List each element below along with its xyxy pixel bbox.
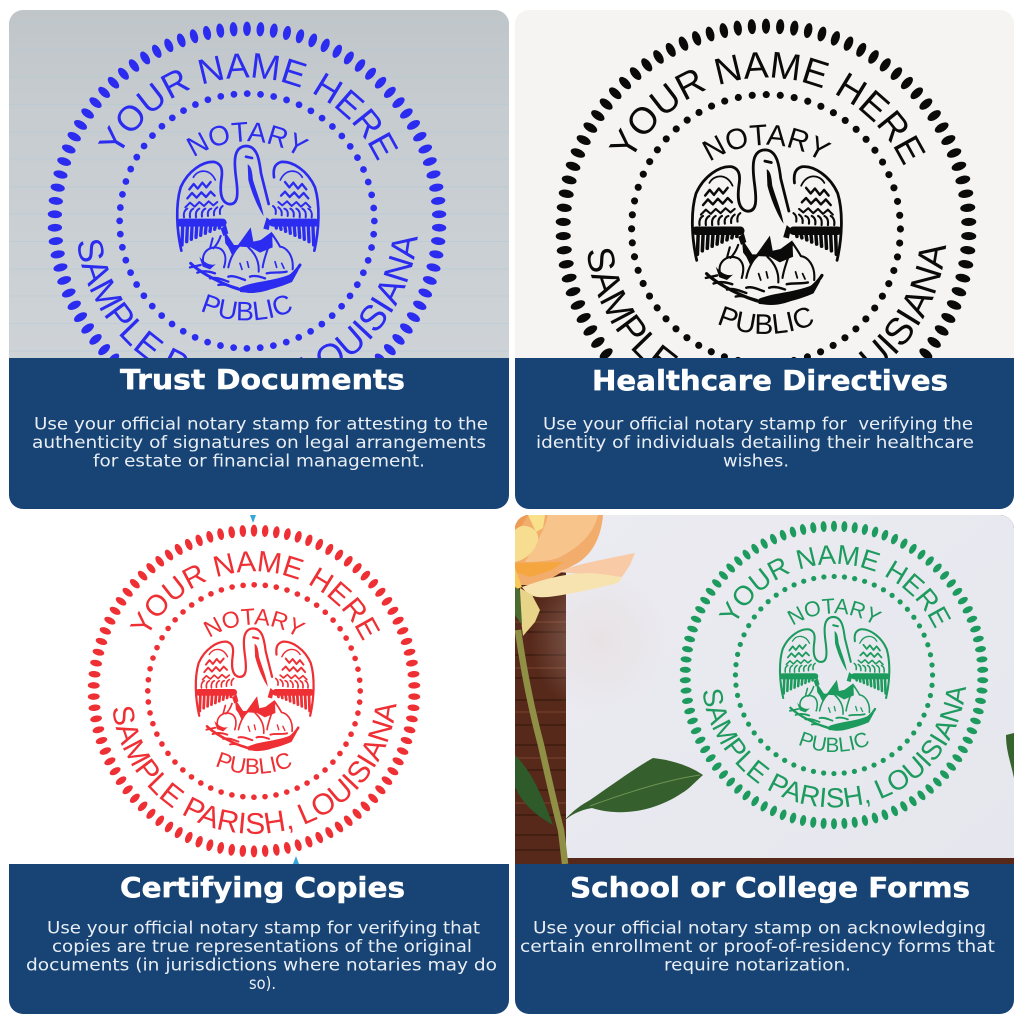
heading: Trust Documents: [120, 364, 405, 396]
caption panel: [515, 358, 1014, 509]
red notary stamp: PUBLIC: [216, 752, 292, 774]
description: so).: [249, 974, 276, 993]
description: [26, 918, 497, 993]
black notary stamp: SAMPLE PARISH, LOUISIANA: [588, 245, 946, 358]
red notary stamp: YOUR NAME HERE: [130, 551, 380, 641]
paper background: [515, 10, 1014, 360]
green notary stamp: YOUR NAME HERE: [718, 545, 952, 628]
description: [32, 414, 488, 470]
green notary stamp: SAMPLE PARISH, LOUISIANA: [703, 687, 966, 808]
caption panel: [9, 358, 509, 509]
panel: School or College Forms: [515, 515, 1014, 1014]
heading: School or College Forms: [570, 872, 970, 904]
description: [538, 416, 973, 466]
blue notary stamp: NOTARY: [186, 122, 310, 156]
panel: Certifying Copies: [9, 515, 509, 1014]
caption panel: [515, 864, 1014, 1014]
heading: Certifying Copies: [120, 872, 405, 904]
flower: rose with stem and leaves: [515, 515, 703, 864]
blue notary stamp: YOUR NAME HERE: [98, 53, 398, 161]
caption panel: [9, 864, 509, 1014]
green notary stamp: [680, 520, 988, 830]
paper photo background: [9, 10, 509, 360]
green notary stamp: PUBLIC: [799, 732, 869, 752]
blue notary stamp: SAMPLE PARISH, LOUISIANA: [78, 236, 418, 358]
white paper sheet: [530, 515, 1014, 858]
description: Use your official notary stamp for verifying the: [543, 414, 973, 434]
red notary stamp: [88, 524, 420, 858]
black notary stamp: PUBLIC: [718, 306, 814, 334]
description: Use your official notary stamp for attesting to the: [34, 414, 488, 434]
white background: [9, 515, 509, 865]
cyan corner marks: [250, 515, 299, 864]
description: authenticity of signatures on legal arrangements: [32, 433, 486, 452]
panel: Healthcare Directives: [515, 10, 1014, 509]
description: [520, 918, 996, 974]
wooden table: [515, 515, 1014, 865]
description: Use your official notary stamp on acknowledging: [533, 918, 986, 938]
blue notary stamp: [48, 22, 446, 358]
red notary stamp: NOTARY: [203, 608, 306, 637]
description: documents (in jurisdictions where notaries may do: [26, 956, 497, 974]
black notary stamp: NOTARY: [702, 124, 832, 161]
leaf at right edge: [1006, 733, 1014, 778]
description: Use your official notary stamp for verifying that: [47, 918, 481, 938]
description: certain enrollment or proof-of-residency forms that: [520, 937, 996, 956]
red notary stamp: SAMPLE PARISH, LOUISIANA: [113, 704, 396, 834]
green notary stamp: NOTARY: [787, 598, 882, 625]
description: wishes.: [723, 452, 789, 470]
description: copies are true representations of the original: [52, 937, 472, 956]
panel: Trust Documents: [9, 10, 509, 509]
description: for estate or financial management.: [93, 452, 425, 470]
black notary stamp: [556, 18, 976, 358]
blue notary stamp: PUBLIC: [202, 294, 292, 320]
heading: Healthcare Directives: [592, 365, 948, 397]
description: require notarization.: [664, 956, 851, 974]
description: identity of individuals detailing their healthcare: [536, 433, 974, 452]
black notary stamp: YOUR NAME HERE: [608, 52, 926, 166]
